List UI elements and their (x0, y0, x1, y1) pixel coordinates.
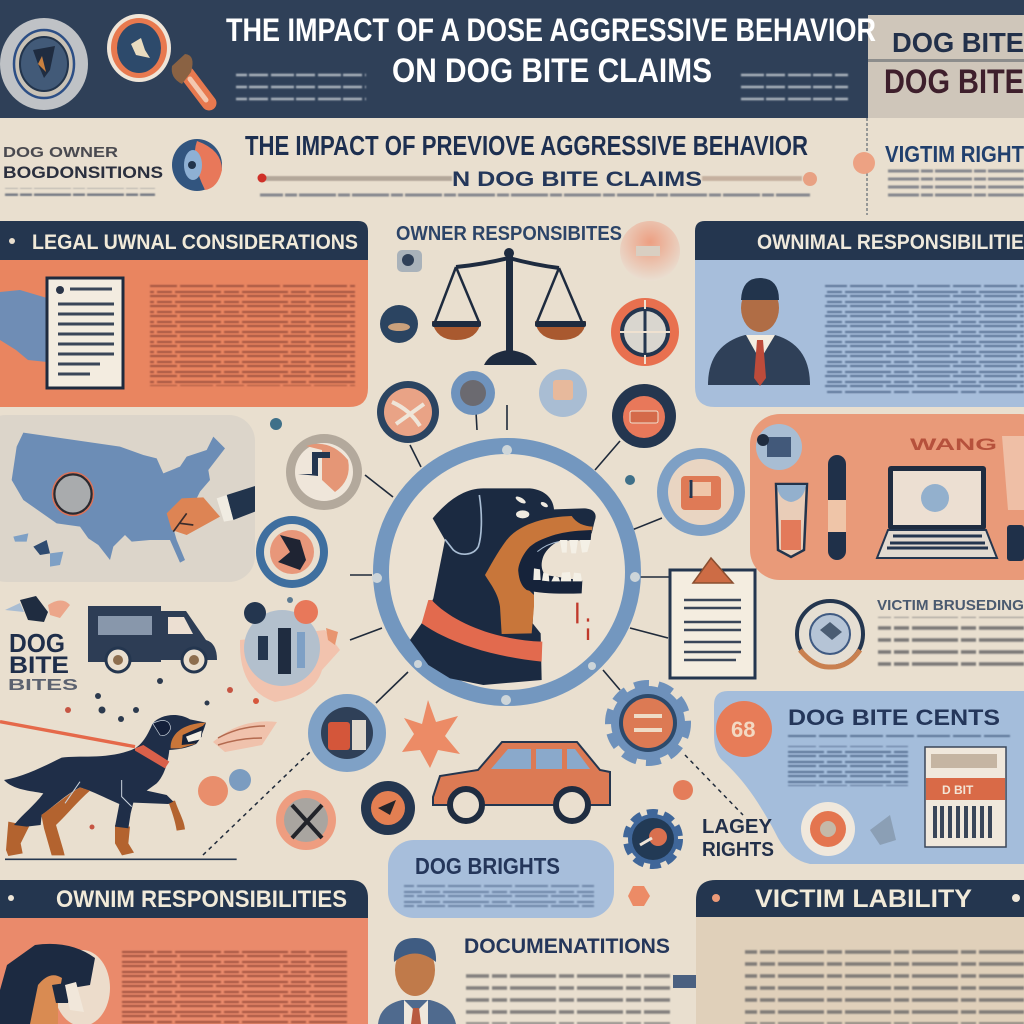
icon: orange counter (716, 701, 772, 757)
icon: seal (801, 802, 855, 856)
dog bite label: BITE (9, 652, 69, 679)
icon: pale blue circle (539, 369, 587, 417)
heading: VICTIM LABILITY (755, 885, 972, 913)
center emblem: rottweiler head (410, 488, 596, 685)
panel: evidence tools (750, 414, 1024, 580)
panel: owner responsibilities bottom (0, 880, 368, 1024)
icon: alarm ring (308, 694, 386, 772)
lagey rights label: RIGHTS (702, 839, 774, 861)
dashed connectors (203, 752, 743, 855)
icon: small navy shape (397, 250, 422, 272)
icon: scales of justice (432, 248, 586, 365)
icon: seal orange (286, 434, 362, 510)
left intro heading: BOGDONSITIONS (3, 163, 163, 182)
intro heading: THE IMPACT OF PREVIOVE AGGRESSIVE BEHAVIOR (245, 130, 808, 161)
subtitle: ON DOG BITE CLAIMS (392, 52, 712, 90)
icon: profile (172, 139, 222, 191)
panel: owner responsibility (695, 221, 1024, 407)
person icon (378, 938, 456, 1024)
dog portrait (0, 944, 110, 1024)
icon: coupe car (433, 742, 610, 821)
scattered debris dots (65, 418, 635, 830)
dog bite label: BITES (8, 677, 78, 694)
icon: orange star (402, 700, 460, 768)
icon: ring right (657, 448, 745, 536)
dog bite label: DOG (9, 628, 65, 658)
title: THE IMPACT OF A DOSE AGGRESSIVE BEHAVIOR (226, 12, 876, 48)
icon: shield circle (797, 601, 863, 667)
USA map (12, 433, 225, 563)
icon: blue blob (229, 769, 251, 791)
icon: speed streak (213, 721, 277, 752)
icon: compass (611, 298, 679, 366)
body text (788, 735, 1010, 786)
icon: hourglass (776, 484, 807, 557)
heading: OWNIM RESPONSIBILITIES (56, 886, 347, 913)
panel: dog bite costs (714, 691, 1024, 864)
pointing hand (167, 486, 255, 535)
icon: small orange gear (673, 780, 693, 800)
receipt (925, 747, 1006, 847)
icon: van (88, 606, 217, 672)
icon: badge (0, 18, 88, 110)
pill: dog brights: DOG BRIGHTS (415, 853, 560, 879)
icons around top of ring (377, 369, 676, 448)
label: WANG (910, 435, 997, 454)
intro sub-heading: N DOG BITE CLAIMS (452, 168, 702, 191)
icon: no-symbol circle (377, 381, 439, 443)
victim rights fine print (888, 168, 1024, 199)
icon: blue ring dog (256, 516, 328, 588)
icon: orange hexagon (628, 886, 650, 906)
icon: gear orange (611, 686, 685, 760)
body text (122, 947, 347, 1024)
icon: document badge (612, 384, 676, 448)
lagey rights label: LAGEY (702, 816, 773, 838)
heading: DOG BITE CENTS (788, 705, 1000, 730)
icon: navy circle face (380, 305, 418, 343)
icon: tool circle (240, 600, 340, 702)
body text (150, 284, 355, 386)
person icon (708, 278, 810, 386)
receipt: D BIT (942, 783, 974, 797)
icon: blue circle (451, 371, 495, 415)
banner fine print right (738, 65, 848, 101)
victim heading: VICTIM BRUSEDING (877, 597, 1024, 614)
intro fine print (260, 193, 810, 199)
icon: small machine (870, 815, 896, 845)
left intro heading: DOG OWNER (3, 144, 118, 161)
icon: right pen (1007, 525, 1024, 561)
dog bite label (8, 628, 78, 694)
body text (825, 284, 1024, 394)
left intro heading (3, 144, 163, 182)
panel: map (0, 415, 255, 582)
icon: orange counter: 68 (731, 717, 755, 742)
lagey rights label (702, 816, 774, 861)
icon: small dog silhouette (5, 596, 70, 622)
banner fine print left (236, 65, 366, 101)
top banner (0, 0, 1024, 118)
icon: navy gear (628, 814, 678, 864)
corner heading 1: DOG BITE (892, 27, 1024, 58)
icon: pale orange circle (620, 221, 680, 281)
pill: dog brights (388, 840, 614, 918)
map magnifier (52, 472, 94, 516)
clipboard (670, 558, 755, 678)
center emblem: ring (372, 445, 640, 705)
map fragment (0, 290, 47, 362)
panel: victim liability (696, 880, 1024, 1024)
map islands (13, 533, 63, 567)
small seal (673, 975, 698, 988)
dashed divider (866, 118, 868, 215)
rottweiler on leash (0, 715, 237, 859)
intro sub-heading (258, 168, 817, 191)
icon: magnifying glass (107, 14, 209, 103)
heading: owner responsibilities center: OWNER RESPONSIBITES (396, 223, 622, 245)
icon: small circle (756, 424, 802, 470)
icon: crossed circle (276, 790, 336, 850)
body text (745, 945, 1024, 1024)
orange dot (853, 152, 875, 174)
documentation text (466, 966, 670, 1024)
connector lines (350, 405, 672, 703)
icon: pen (828, 455, 846, 560)
left intro fine print (5, 188, 155, 196)
icon: laptop (877, 466, 997, 558)
victim fine print (878, 617, 1024, 671)
document icon (47, 278, 123, 388)
heading: legal: LEGAL UWNAL CONSIDERATIONS (32, 231, 358, 254)
panel: legal considerations (0, 221, 368, 407)
icon: tan decoration (1002, 436, 1024, 510)
icon: navy orange circle (361, 781, 415, 835)
documentation heading: DOCUMENATITIONS (464, 935, 670, 958)
icon: orange blob (198, 776, 228, 806)
